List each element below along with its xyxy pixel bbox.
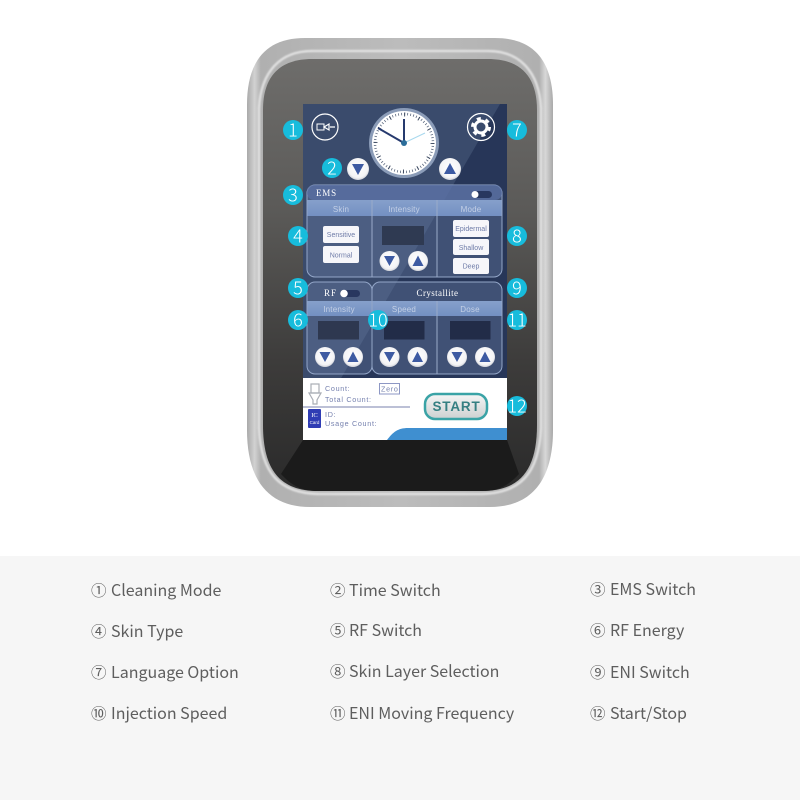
legend column 1: Injection Speed — [111, 700, 227, 724]
legend column 2: ⑤ — [330, 619, 346, 641]
callout badges: 4 — [293, 222, 303, 248]
legend column 1: ⑩ — [91, 702, 107, 724]
callout badges: 2 — [327, 154, 337, 180]
count labels: Total Count: — [325, 395, 372, 404]
panel: Crystallite — [372, 282, 502, 374]
IC card icon: IC — [311, 412, 318, 419]
intensity display — [382, 226, 424, 245]
count labels: Count: — [325, 384, 350, 393]
EMS header row — [308, 200, 502, 216]
start button: START — [432, 399, 480, 414]
legend column 1: ④ — [91, 620, 107, 642]
icon: cleaning mode — [312, 114, 338, 140]
callout badges: 8 — [512, 222, 522, 248]
legend column 2: ⑧ — [330, 660, 346, 682]
RF buttons — [315, 347, 363, 367]
blue corner — [387, 428, 507, 440]
speed and dose buttons — [380, 347, 495, 367]
legend column 1: ① — [91, 579, 107, 601]
skin buttons: Sensitive — [327, 232, 355, 239]
clock — [369, 108, 439, 178]
IC card icon — [308, 409, 321, 428]
legend column 2 — [330, 577, 515, 724]
legend column 2: ENI Moving Frequency — [349, 700, 515, 724]
legend column 1 — [91, 577, 239, 724]
callout badges: 5 — [293, 274, 303, 300]
start button — [425, 394, 487, 419]
legend column 3: ⑫ — [590, 702, 606, 724]
icon: settings gear — [468, 114, 494, 140]
status panel — [303, 378, 507, 440]
callout badges: 6 — [293, 306, 303, 332]
handpiece icon — [309, 384, 321, 404]
EMS toggle — [472, 191, 492, 198]
callout badges: 1 — [288, 116, 298, 142]
legend column 3: ⑥ — [590, 619, 606, 641]
RF header: Intensity — [323, 305, 355, 314]
count labels — [325, 384, 377, 428]
count labels: Usage Count: — [325, 419, 377, 428]
legend column 1: ⑦ — [91, 661, 107, 683]
device body — [247, 38, 553, 507]
bezel lower black area — [281, 440, 519, 491]
EMS header row: Mode — [461, 205, 482, 214]
legend column 3: ⑨ — [590, 661, 606, 683]
RF display — [318, 321, 359, 340]
EMS header row: Intensity — [388, 205, 420, 214]
RF toggle — [340, 290, 360, 297]
panel: RF: RF — [324, 288, 337, 298]
legend column 2: RF Switch — [349, 617, 422, 641]
legend column 3 — [590, 576, 696, 724]
legend column 2: ② — [330, 579, 346, 601]
legend panel — [0, 556, 800, 800]
legend column 2: Time Switch — [349, 577, 441, 601]
legend column 3: ③ — [590, 578, 606, 600]
callout badges: 11 — [507, 306, 527, 332]
mode buttons — [453, 220, 489, 274]
Crystallite headers — [372, 301, 502, 316]
time down button — [347, 158, 369, 180]
legend column 2: Skin Layer Selection — [349, 658, 499, 682]
panel: EMS — [307, 185, 502, 277]
screen — [303, 104, 507, 378]
callout badges: 12 — [507, 392, 527, 418]
device bezel — [263, 59, 537, 491]
panel: EMS: EMS — [316, 188, 337, 198]
callout badges: 3 — [288, 182, 298, 208]
legend column 1: Skin Type — [111, 618, 183, 642]
count labels: ID: — [325, 410, 336, 419]
legend column 3: RF Energy — [610, 617, 685, 641]
panel: RF — [307, 282, 372, 374]
callout badges: 10 — [368, 306, 388, 332]
legend column 3: EMS Switch — [610, 576, 696, 600]
callout badges: 9 — [512, 274, 522, 300]
panel: Crystallite: Crystallite — [417, 288, 458, 298]
mode buttons: Epidermal — [455, 226, 487, 233]
Crystallite headers: Speed — [392, 305, 416, 314]
screen dark diagonal — [340, 104, 507, 380]
skin buttons — [323, 226, 359, 263]
zero button: Zero — [381, 384, 399, 394]
mode buttons: Deep — [463, 264, 479, 270]
legend column 1: Cleaning Mode — [111, 577, 222, 601]
speed and dose displays — [384, 321, 490, 340]
legend column 2: ⑪ — [330, 702, 346, 724]
EMS header row: Skin — [333, 205, 349, 214]
legend column 3: ENI Switch — [610, 659, 690, 683]
callout badges: 7 — [512, 116, 522, 142]
mode buttons: Shallow — [459, 245, 484, 252]
IC card icon: Card — [310, 420, 320, 425]
Crystallite headers: Dose — [460, 305, 480, 314]
time up button — [439, 158, 461, 180]
intensity buttons — [380, 251, 428, 271]
legend column 3: Start/Stop — [610, 700, 687, 724]
legend column 1: Language Option — [111, 659, 239, 683]
callout badges — [283, 116, 527, 418]
skin buttons: Normal — [330, 252, 353, 260]
